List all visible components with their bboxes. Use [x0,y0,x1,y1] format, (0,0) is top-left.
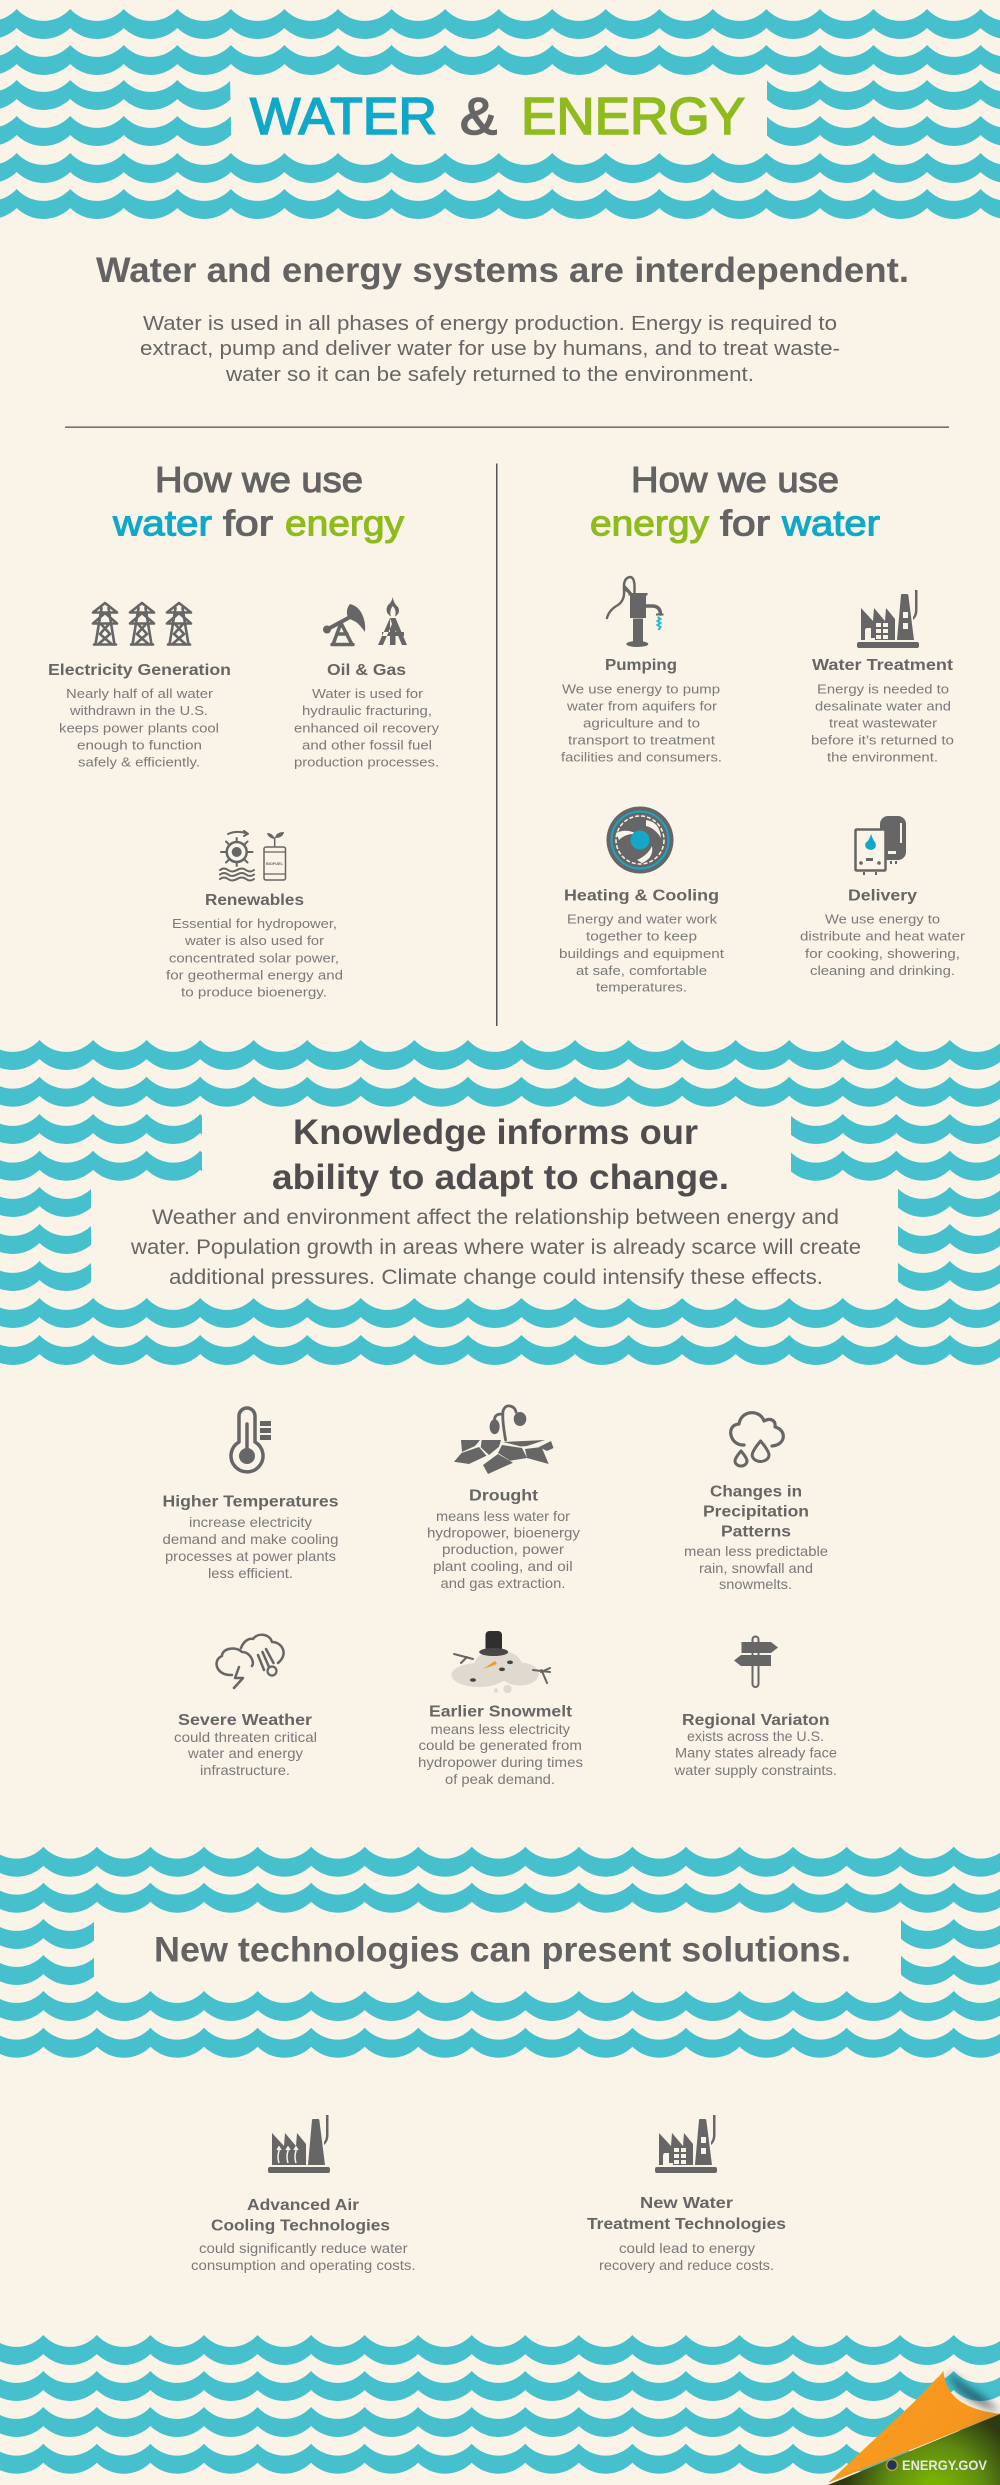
text: electricity generation: Nearly half of all water [66,686,214,701]
text: advanced air cooling: could significantly reduce water [199,2240,408,2256]
icon: rain cloud [731,1413,783,1466]
icon: severe weather storm clouds [217,1635,284,1688]
text: drought: production, power [442,1541,564,1557]
text: electricity generation [48,662,231,769]
icon: oil pump and gas flame [323,597,407,645]
text block: knowledge [130,1205,861,1289]
text: delivery: We use energy to [825,911,940,926]
text: oil and gas: Water is used for [312,686,424,701]
text: heating and cooling: at safe, comfortable [576,963,707,978]
text: oil and gas: and other fossil fuel [302,737,432,752]
text: heating and cooling: Heating & Cooling [564,887,719,904]
icon: water heater [856,816,906,875]
text: higher temperatures: increase electricity [189,1514,312,1530]
page curl: energy.gov corner: ENERGY.GOV [902,2457,988,2473]
heading: knowledge: Knowledge informs our [293,1113,698,1152]
heading: knowledge: ability to adapt to change. [272,1158,729,1197]
text: heating and cooling: temperatures. [596,979,687,994]
heading: how we use energy for water: energy [590,502,709,544]
text: water treatment: Energy is needed to [817,682,949,697]
text: regional variation: Many states already face [675,1745,837,1761]
text: changes in precipitation patterns: mean less predictable [684,1543,828,1559]
text: advanced air cooling [191,2197,416,2273]
title: & [460,88,497,146]
text: pumping: agriculture and to [583,716,700,731]
text: earlier snowmelt: of peak demand. [445,1771,555,1787]
icon: hydro turbine and biofuel barrel: BIOFUEL [266,861,284,866]
icon: transmission towers [93,603,191,644]
text block: knowledge: additional pressures. Climate change could intensify these effects. [169,1265,823,1289]
text: changes in precipitation patterns: rain, snowfall and [699,1560,813,1576]
text block: knowledge: Weather and environment affect the relationship between energy and [152,1205,839,1229]
wave band: top header [0,9,1000,219]
heading: how we use water for energy: energy [285,502,404,544]
text: pumping: We use energy to pump [562,682,720,697]
text: new water treatment [587,2195,786,2273]
text: water treatment: the environment. [827,750,938,765]
icon: signpost [734,1636,778,1687]
text: regional variation [673,1712,837,1778]
text: earlier snowmelt: hydropower during times [418,1754,583,1770]
text: pumping: facilities and consumers. [561,750,722,765]
text: earlier snowmelt: could be generated from [418,1737,582,1753]
text: advanced air cooling: Advanced Air [247,2197,359,2214]
icon: water hand pump [607,577,664,647]
text: advanced air cooling: consumption and operating costs. [191,2257,416,2273]
heading: interdependent: Water and energy systems are interdependent. [96,251,909,290]
text: delivery: cleaning and drinking. [810,963,955,978]
heading: how we use energy for water: How we use [631,459,839,500]
text: higher temperatures: less efficient. [208,1565,293,1581]
title: WATER [250,88,437,146]
icon: drought cracked ground with wilted plant [454,1406,554,1474]
heading: how we use energy for water [590,459,880,544]
intro text block: Water is used in all phases of energy production. Energy is required to [143,312,837,335]
text: severe weather: Severe Weather [178,1712,312,1729]
heading: how we use water for energy: How we use [155,459,363,500]
text: changes in precipitation patterns: Precipitation [703,1504,809,1521]
text: oil and gas: hydraulic fracturing, [302,703,432,718]
wave band: bottom [0,2335,1000,2474]
text: pumping: water from aquifers for [566,699,718,714]
text: water treatment: Water Treatment [812,657,953,674]
heading: how we use water for energy: water [112,502,212,544]
text: renewables: Renewables [205,892,304,909]
heading: how we use water for energy: for [223,502,273,544]
text: heating and cooling: Energy and water work [567,911,718,926]
text: water treatment: before it’s returned to [811,733,954,748]
text: changes in precipitation patterns: snowmelts. [719,1576,792,1592]
text: new water treatment: recovery and reduce costs. [599,2257,774,2273]
icon: melted snowman [452,1631,550,1693]
text: severe weather: could threaten critical [174,1729,317,1745]
text: renewables: to produce bioenergy. [181,984,327,1000]
text: drought: hydropower, bioenergy [427,1525,580,1541]
title: ENERGY [521,88,745,146]
text: severe weather [174,1712,317,1778]
text: severe weather: infrastructure. [200,1762,290,1778]
text: electricity generation: withdrawn in the U.S. [69,703,208,718]
text: drought: plant cooling, and oil [433,1558,573,1574]
icon: fan [606,806,674,874]
heading: new technologies: New technologies can present solutions. [154,1931,851,1970]
icon: air cooled plant [268,2115,330,2173]
title [250,88,745,146]
page curl: energy.gov corner [828,2371,1000,2485]
heading: knowledge [272,1113,729,1197]
text: drought: means less water for [436,1508,570,1524]
text: changes in precipitation patterns: Changes in [710,1484,802,1501]
wave band: new technologies [0,1847,1000,2058]
text: delivery: distribute and heat water [800,928,966,943]
icon: thermometer [231,1408,271,1472]
text: delivery: for cooking, showering, [805,946,960,961]
text: oil and gas: production processes. [294,754,439,769]
text: regional variation: exists across the U.S. [687,1728,824,1744]
text: heating and cooling [559,887,724,994]
text: heating and cooling: together to keep [586,928,697,943]
text: renewables: concentrated solar power, [169,950,339,966]
text: earlier snowmelt: means less electricity [430,1721,570,1737]
intro text block [140,312,840,386]
text: new water treatment: Treatment Technologies [587,2216,786,2233]
text: delivery [800,887,966,978]
heading: how we use water for energy [112,459,404,544]
text: water treatment: treat wastewater [829,716,938,731]
text block: knowledge: water. Population growth in areas where water is already scarce will create [130,1235,861,1259]
text: earlier snowmelt [418,1704,583,1787]
text: oil and gas: enhanced oil recovery [294,720,440,735]
text: new water treatment: New Water [640,2195,733,2212]
text: pumping: Pumping [605,657,677,674]
text: severe weather: water and energy [187,1745,303,1761]
text: higher temperatures: Higher Temperatures [162,1494,339,1511]
text: electricity generation: keeps power plants cool [59,720,219,735]
icon: new water treatment plant [655,2115,717,2173]
heading: how we use energy for water: water [781,502,880,544]
wave band: knowledge section [0,1040,1000,1365]
text: higher temperatures: processes at power plants [165,1548,336,1564]
text: changes in precipitation patterns: Patterns [721,1524,791,1541]
text: renewables: for geothermal energy and [166,968,343,982]
text: heating and cooling: buildings and equipment [559,946,724,961]
text: renewables: Essential for hydropower, [172,916,337,931]
text: earlier snowmelt: Earlier Snowmelt [429,1704,573,1721]
text: pumping [561,657,722,765]
text: renewables: water is also used for [184,933,325,948]
text: drought [427,1488,580,1591]
text: electricity generation: Electricity Generation [48,662,231,679]
text: electricity generation: safely & efficiently. [78,754,200,769]
text: regional variation: Regional Variaton [682,1712,830,1729]
text: drought: Drought [469,1488,539,1505]
text: electricity generation: enough to function [77,737,202,752]
text: higher temperatures [162,1494,339,1581]
text: higher temperatures: demand and make cooling [162,1531,338,1547]
text: water treatment [811,657,954,765]
text: advanced air cooling: Cooling Technologies [211,2218,390,2235]
text: changes in precipitation patterns [684,1484,828,1592]
text: renewables [166,892,343,1000]
text: delivery: Delivery [848,887,917,904]
intro text block: extract, pump and deliver water for use by humans, and to treat waste- [140,337,840,360]
icon: water treatment plant [857,590,919,648]
icon: hydro turbine and biofuel barrel [220,831,286,880]
text: new water treatment: could lead to energy [619,2240,755,2256]
intro text block: water so it can be safely returned to the environment. [225,363,754,386]
text: water treatment: desalinate water and [815,699,951,714]
text: drought: and gas extraction. [440,1575,565,1591]
text: oil and gas [294,662,440,769]
heading: how we use energy for water: for [720,502,770,544]
text: pumping: transport to treatment [568,733,715,748]
text: oil and gas: Oil & Gas [327,662,406,679]
text: regional variation: water supply constraints. [673,1762,837,1778]
